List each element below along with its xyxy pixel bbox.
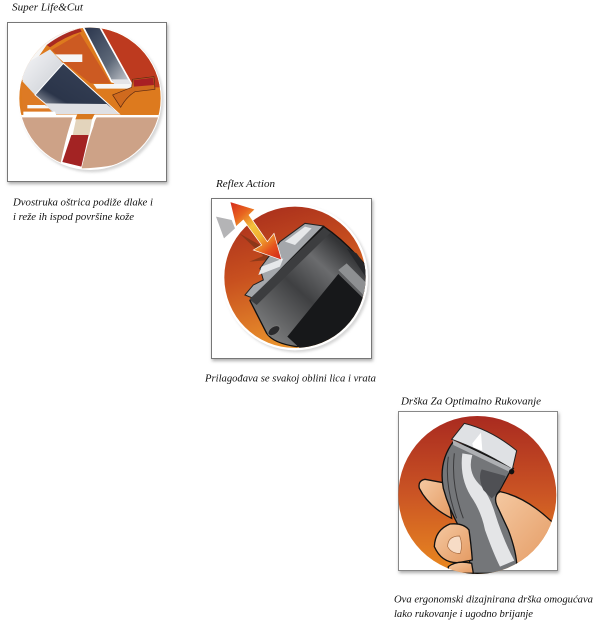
panel: Drška Za Optimalno Rukovanje — [394, 396, 593, 620]
caption: Prilagođava se svakoj oblini lica i vrata — [204, 372, 376, 384]
heading: Drška Za Optimalno Rukovanje — [400, 396, 541, 408]
caption: Ova ergonomski dizajnirana drška omogućava — [394, 594, 593, 606]
image frame — [212, 198, 372, 358]
head — [452, 423, 517, 469]
caption: i reže ih ispod površine kože — [13, 211, 134, 223]
icon: double-headed arrow — [230, 202, 282, 260]
illustration: shaver head with arrow — [216, 202, 373, 352]
illustration: blade cross-section — [17, 20, 164, 175]
finger left — [419, 479, 452, 518]
image frame — [398, 412, 558, 570]
shaver body — [442, 442, 517, 573]
illustration: hand holding shaver — [398, 416, 558, 574]
heading: Reflex Action: Reflex Action — [215, 178, 275, 190]
caption: Dvostruka oštrica podiže dlake i — [12, 196, 153, 208]
panel: Reflex Action — [204, 178, 376, 384]
thumb — [434, 524, 472, 563]
heading: Super Life&Cut: Super Life&Cut — [12, 2, 84, 14]
image frame — [8, 22, 166, 182]
shaver head — [245, 223, 323, 298]
panel: Super Life&Cut — [8, 2, 166, 223]
hand right — [496, 491, 552, 564]
caption: lako rukovanje i ugodno brijanje — [394, 608, 533, 620]
